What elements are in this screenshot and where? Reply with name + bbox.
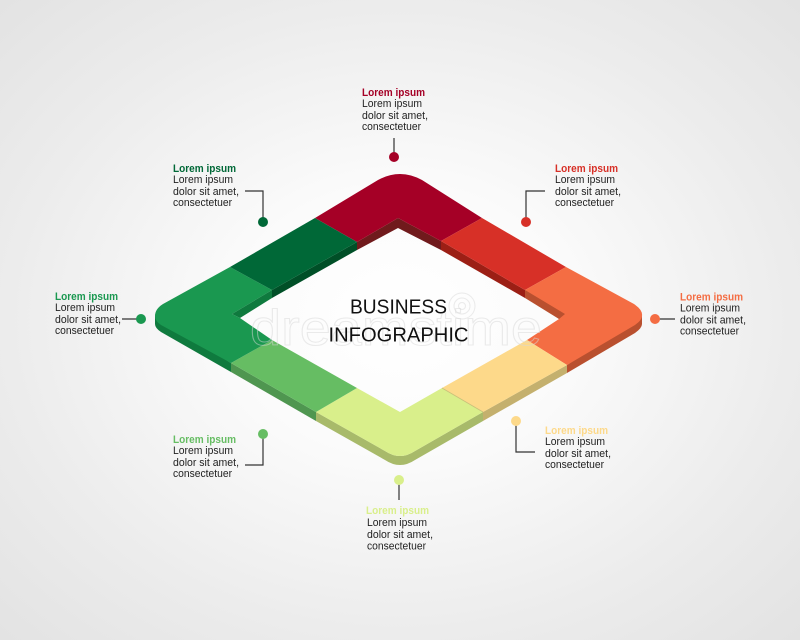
callout: yellow: consectetuer bbox=[545, 459, 604, 471]
callout: crimson: dolor sit amet, bbox=[362, 110, 428, 122]
segment: green left corner bbox=[155, 267, 272, 372]
callout: dark green: Lorem ipsum bbox=[173, 174, 233, 186]
callout: red: dolor sit amet, bbox=[555, 186, 621, 198]
diamond ring bbox=[155, 174, 642, 465]
callout: lime: consectetuer bbox=[367, 540, 426, 552]
callout: green left bbox=[55, 291, 146, 337]
callout: red: Lorem ipsum bbox=[555, 174, 615, 186]
callout: lime: Lorem ipsum bbox=[367, 517, 427, 529]
callout: dark green bbox=[173, 163, 268, 227]
segment: yellow bbox=[442, 340, 567, 421]
callout: dark green: dolor sit amet, bbox=[173, 186, 239, 198]
callout: crimson: consectetuer bbox=[362, 121, 421, 133]
callout: orange: Lorem ipsum bbox=[680, 292, 743, 304]
segment: red bbox=[441, 218, 566, 298]
callout: green left: consectetuer bbox=[55, 325, 114, 337]
callout: orange: consectetuer bbox=[680, 326, 739, 338]
callout: crimson: Lorem ipsum bbox=[362, 87, 425, 99]
callout: yellow: Lorem ipsum bbox=[545, 436, 605, 448]
callout: crimson bbox=[362, 87, 428, 162]
callout: orange bbox=[650, 292, 746, 338]
callout: mid green bbox=[173, 429, 268, 480]
callout: dark green: Lorem ipsum bbox=[173, 163, 236, 175]
callout: crimson: Lorem ipsum bbox=[362, 98, 422, 110]
segment: dark green bbox=[230, 218, 357, 298]
callout: green left: Lorem ipsum bbox=[55, 291, 118, 303]
callout: green left: Lorem ipsum bbox=[55, 302, 115, 314]
title: BUSINESS bbox=[350, 296, 447, 318]
callout: yellow bbox=[511, 416, 611, 471]
callout: lime bbox=[366, 475, 433, 552]
segment: crimson top bbox=[315, 174, 482, 250]
segment: mid green bbox=[231, 340, 357, 421]
callout: yellow: dolor sit amet, bbox=[545, 448, 611, 460]
watermark: dreamstime bbox=[250, 300, 542, 356]
callout: green left: dolor sit amet, bbox=[55, 314, 121, 326]
callout: orange: Lorem ipsum bbox=[680, 302, 740, 314]
callout: mid green: consectetuer bbox=[173, 468, 232, 480]
callout: lime: dolor sit amet, bbox=[367, 529, 433, 541]
callout: yellow: Lorem ipsum bbox=[545, 425, 608, 437]
callout: lime: Lorem ipsum bbox=[366, 505, 429, 517]
callout: orange: dolor sit amet, bbox=[680, 314, 746, 326]
callout: red bbox=[521, 163, 621, 227]
callout: dark green: consectetuer bbox=[173, 197, 232, 209]
callout: mid green: dolor sit amet, bbox=[173, 457, 239, 469]
title bbox=[328, 296, 469, 346]
callout: mid green: Lorem ipsum bbox=[173, 445, 233, 457]
callout: red: consectetuer bbox=[555, 197, 614, 209]
callout: mid green: Lorem ipsum bbox=[173, 434, 236, 446]
segment: orange right corner bbox=[525, 267, 642, 373]
callout: red: Lorem ipsum bbox=[555, 163, 618, 175]
title: INFOGRAPHIC bbox=[328, 324, 469, 346]
segment: lime bottom bbox=[316, 388, 483, 465]
